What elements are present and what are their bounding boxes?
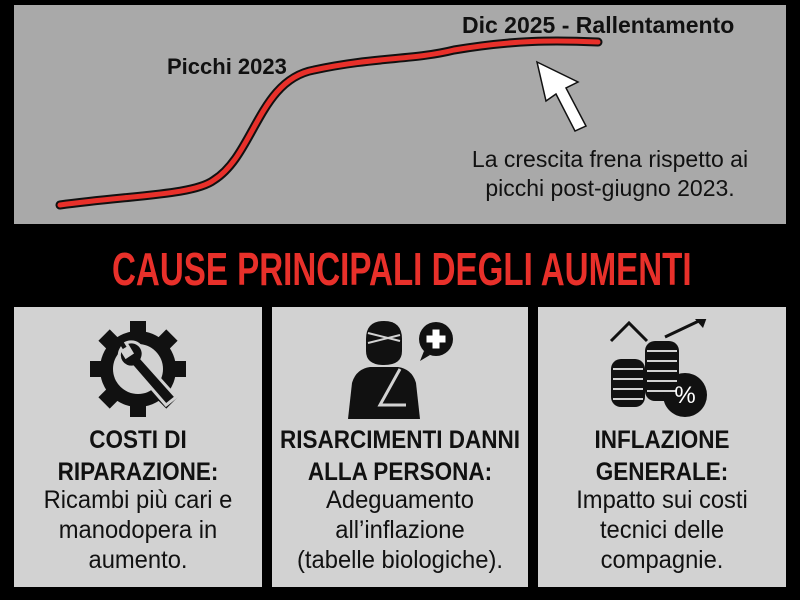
body text (297, 486, 503, 574)
arrow: white (536, 60, 587, 132)
body text: Impatto sui costi (576, 486, 748, 514)
chart: line (56, 36, 602, 210)
panel: costi di riparazione (14, 307, 262, 587)
body text: Adeguamento (326, 486, 474, 514)
panel: risarcimenti (272, 307, 528, 587)
heading: ALLA PERSONA: (308, 458, 492, 486)
panel: inflazione (538, 307, 786, 587)
heading: GENERALE: (596, 458, 728, 486)
body text: manodopera in (59, 516, 217, 544)
icon: injured person (348, 321, 453, 419)
icon: gear wrench (90, 321, 186, 417)
heading: COSTI DI (89, 426, 187, 454)
body text (44, 486, 232, 574)
body text: compagnie. (601, 546, 723, 574)
label: Picchi 2023: Picchi 2023 (167, 54, 287, 79)
callout text (472, 146, 748, 201)
body text: all’inflazione (335, 516, 465, 544)
icon: coins percent: % (674, 382, 696, 409)
body text: Ricambi più cari e (44, 486, 232, 514)
heading (58, 426, 218, 486)
title: CAUSE PRINCIPALI DEGLI AUMENTI (112, 243, 692, 295)
heading (594, 426, 730, 486)
body text (576, 486, 748, 574)
body text: aumento. (88, 546, 188, 574)
heading: INFLAZIONE (594, 426, 730, 454)
heading (280, 426, 520, 486)
callout text: La crescita frena rispetto ai (472, 146, 748, 172)
body text: tecnici delle (600, 516, 724, 544)
icon: coins percent (610, 319, 707, 417)
heading: RIPARAZIONE: (58, 458, 218, 486)
body text: (tabelle biologiche). (297, 546, 503, 574)
callout text: picchi post-giugno 2023. (485, 175, 735, 201)
heading: RISARCIMENTI DANNI (280, 426, 520, 454)
label: Dic 2025: Dic 2025 - Rallentamento (462, 12, 734, 38)
panel: chart (14, 5, 786, 224)
